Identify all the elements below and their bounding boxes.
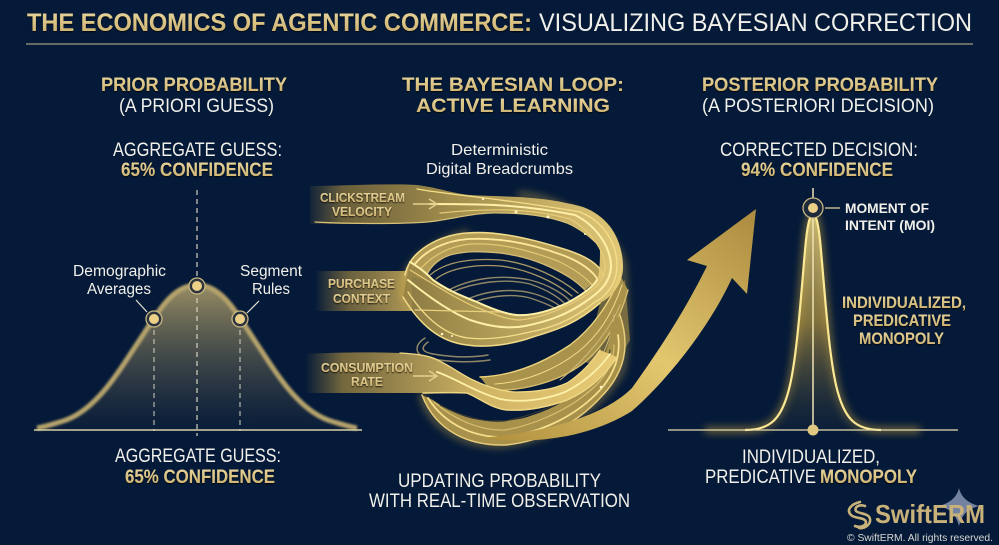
marker: moment of intent [803,198,823,218]
icon: watermark star [939,488,979,526]
label: individualized monopoly side: MONOPOLY [859,330,944,348]
band: purchase context [315,271,412,311]
label: clickstream velocity: VELOCITY [332,205,393,219]
label: consumption rate [321,361,413,389]
bell curve chart [34,190,362,436]
top confidence text [720,140,918,181]
bottom text: individualized monopoly: MONOPOLY [820,467,917,488]
peak chart [668,188,958,436]
heading: bayesian loop: THE BAYESIAN LOOP: [402,75,624,96]
heading: posterior probability: POSTERIOR PROBABILITY [702,75,938,96]
panel: prior probability [34,75,362,488]
bottom text: individualized monopoly: PREDICATIVE [705,467,816,488]
sparkles [441,198,602,388]
arrow: clickstream [413,199,437,209]
label: individualized monopoly side: PREDICATIVE [853,312,951,330]
marker: peak [189,278,205,294]
lower back ring [417,338,490,362]
bottom confidence text: AGGREGATE GUESS: [115,446,281,467]
arrow: rising to posterior [480,209,756,440]
heading: prior probability [101,75,287,117]
label: moment of intent: MOMENT OF [845,201,929,216]
label: individualized monopoly side [842,294,966,348]
heading: prior probability: PRIOR PROBABILITY [101,75,287,96]
subtitle: digital breadcrumbs: Deterministic [451,142,548,159]
top confidence text: AGGREGATE GUESS: [113,140,282,161]
right side fill [585,280,630,372]
label: purchase context [328,277,395,306]
diagonal crossing band [480,275,628,390]
front ribbon from clickstream [310,184,623,346]
label: demographic averages [73,263,166,298]
bottom confidence text [115,446,281,488]
spiral ribbon [305,184,630,445]
label: clickstream velocity: CLICKSTREAM [320,191,405,205]
subtitle: digital breadcrumbs: Digital Breadcrumbs [426,161,573,178]
icon: swirl [849,502,870,528]
lower ring band [422,315,625,445]
label: consumption rate: CONSUMPTION [321,361,413,375]
copyright: © SwiftERM. All rights reserved. [847,532,993,544]
panel: posterior probability [668,75,966,488]
marker: demographic averages [146,311,162,327]
label: consumption rate: RATE [351,375,383,389]
top confidence text: 65% CONFIDENCE [121,160,273,181]
label: clickstream velocity [320,191,405,219]
wordmark: SwiftERM [875,499,985,529]
caption: updating probability [369,471,630,512]
heading: bayesian loop: ACTIVE LEARNING [416,96,610,117]
heading: posterior probability: (A POSTERIORI DECISION) [702,96,934,117]
label: demographic averages: Averages [87,281,151,298]
bottom text: individualized monopoly [705,447,917,488]
bottom confidence text: 65% CONFIDENCE [125,467,275,488]
label: segment rules: Rules [252,281,290,298]
logo: SwiftERM [847,499,993,544]
title: THE ECONOMICS OF AGENTIC COMMERCE: [27,9,532,37]
caption: updating probability: UPDATING PROBABILITY [398,471,601,492]
marker: segment rules [232,311,248,327]
heading: bayesian loop [402,75,624,117]
label: individualized monopoly side: INDIVIDUALIZED, [842,294,966,312]
caption: updating probability: WITH REAL-TIME OBSERVATION [369,491,630,512]
label: purchase context: CONTEXT [333,292,390,306]
heading: posterior probability [702,75,938,117]
top confidence text [113,140,282,181]
title: VISUALIZING BAYESIAN CORRECTION [539,9,972,37]
arrow: consumption [413,371,437,381]
top confidence text: 94% CONFIDENCE [741,160,893,181]
label: segment rules: Segment [240,263,303,280]
top confidence text: CORRECTED DECISION: [720,140,918,161]
label: purchase context: PURCHASE [328,277,395,291]
bottom text: individualized monopoly: INDIVIDUALIZED, [742,447,880,468]
label: moment of intent [845,201,935,233]
label: moment of intent: INTENT (MOI) [845,218,935,233]
title [27,9,972,37]
back rings [445,277,572,310]
subtitle: digital breadcrumbs [426,142,573,178]
marker: axis point [808,424,818,436]
heading: prior probability: (A PRIORI GUESS) [119,96,274,117]
top ring band [405,233,604,290]
label: demographic averages: Demographic [73,263,166,280]
panel: bayesian loop [305,75,756,512]
inner coil lines [430,260,578,296]
label: segment rules [240,263,303,298]
consumption ribbon [305,350,617,410]
outer glow [403,195,625,445]
